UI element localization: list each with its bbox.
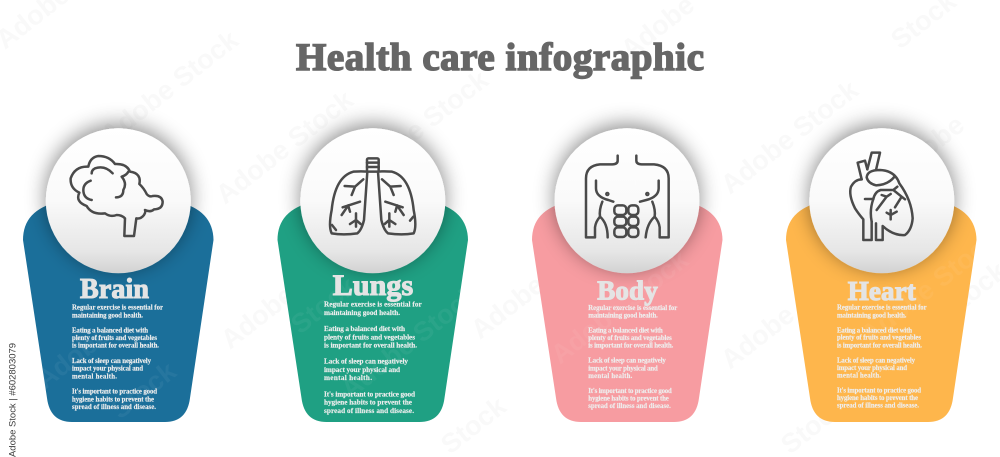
watermark overlay on cards (30, 224, 1000, 425)
brain text (72, 304, 163, 411)
heart text: spread of illness and disease. (837, 402, 919, 409)
heart text: impact your physical and (837, 365, 907, 372)
body text: is important for overall health. (588, 343, 674, 350)
heart text: Lack of sleep can negatively (837, 357, 916, 364)
body text: Regular exercise is essential for (588, 305, 677, 312)
brain text: Eating a balanced diet with (72, 327, 148, 334)
watermark overlay on cards: Stock (105, 355, 182, 425)
watermark pattern on background: Adobe (215, 279, 300, 355)
icon: lungs (330, 158, 415, 234)
brain text: mental health. (72, 373, 117, 380)
panel: lungs (278, 128, 468, 422)
lungs text: It's important to practice good (324, 390, 415, 398)
icon: brain (71, 156, 163, 236)
watermark pattern on background: Adobe (715, 299, 800, 375)
stock id side label: Adobe Stock | #602803079 (8, 343, 18, 457)
body text: It's important to practice good (588, 388, 672, 395)
brain text: is important for overall health. (72, 343, 159, 350)
body text: Lack of sleep can negatively (588, 358, 666, 365)
brain text: hygiene habits to prevent the (72, 396, 154, 403)
brain icon circle (46, 128, 191, 273)
panel: brain (23, 128, 214, 422)
panel: body (532, 128, 722, 422)
body text: impact your physical and (588, 365, 658, 372)
body text: Eating a balanced diet with (588, 328, 663, 335)
heart text: It's important to practice good (837, 387, 921, 394)
watermark pattern on background: Adobe Stock (210, 84, 360, 210)
icon: heart (850, 153, 913, 240)
heart text: is important for overall health. (837, 342, 922, 349)
watermark overlay on cards: Adobe Stock (335, 279, 485, 405)
title: Health care infographic (296, 36, 704, 79)
heart text: Eating a balanced diet with (837, 327, 912, 334)
panel: heart (786, 128, 976, 422)
lungs text: spread of illness and disease. (324, 407, 414, 415)
watermark pattern on background: Adobe (885, 109, 970, 185)
heart text: Regular exercise is essential for (837, 305, 927, 312)
lungs text: mental health. (324, 374, 372, 382)
body heading: Body (597, 275, 658, 305)
brain text: spread of illness and disease. (72, 404, 156, 411)
brain card background (23, 202, 214, 422)
heart text: maintaining good health. (837, 312, 907, 319)
heart card background (786, 202, 976, 422)
heart text (837, 305, 927, 409)
lungs heading: Lungs (333, 269, 413, 302)
heart heading: Heart (848, 276, 916, 306)
lungs text: impact your physical and (324, 366, 400, 374)
lungs icon circle (300, 128, 445, 273)
body icon circle (554, 128, 700, 273)
watermark overlay on cards: Adobe Stock (545, 244, 695, 370)
lungs text: Lack of sleep can negatively (324, 358, 408, 366)
body text: spread of illness and disease. (588, 403, 671, 410)
icon: torso (586, 156, 669, 237)
watermark overlay on cards: Adobe (30, 319, 115, 395)
brain text: maintaining good health. (72, 312, 143, 319)
watermark pattern on background: Adobe Stock (95, 24, 245, 150)
lungs text: Regular exercise is essential for (324, 301, 422, 309)
body text: plenty of fruits and vegetables (588, 335, 672, 342)
body text: hygiene habits to prevent the (588, 395, 669, 402)
lungs text: Eating a balanced diet with (324, 325, 405, 333)
brain text: It's important to practice good (72, 389, 157, 396)
brain text: Regular exercise is essential for (72, 304, 163, 311)
lungs text: maintaining good health. (324, 309, 400, 317)
lungs text: plenty of fruits and vegetables (324, 333, 415, 341)
lungs card background (278, 202, 468, 422)
body text: mental health. (588, 373, 633, 380)
brain text: Lack of sleep can negatively (72, 358, 152, 365)
lungs text: is important for overall health. (324, 341, 417, 349)
watermark pattern on background: Adobe (465, 269, 550, 345)
watermark pattern on background: Adobe Stock (345, 64, 495, 190)
body text (588, 305, 677, 410)
watermark overlay on cards: Adobe Stock (855, 224, 1000, 350)
body text: maintaining good health. (588, 313, 658, 320)
heart text: plenty of fruits and vegetables (837, 335, 921, 342)
body card background (532, 202, 722, 422)
heart icon circle (809, 128, 954, 273)
lungs text: hygiene habits to prevent the (324, 399, 412, 407)
brain heading: Brain (80, 274, 149, 305)
watermark pattern on background: Adobe Stock (715, 74, 865, 200)
lungs text (324, 301, 422, 415)
watermark overlay on cards: Stock (285, 270, 362, 340)
heart text: hygiene habits to prevent the (837, 395, 918, 402)
brain text: impact your physical and (72, 366, 143, 373)
brain text: plenty of fruits and vegetables (72, 335, 157, 342)
heart text: mental health. (837, 372, 881, 379)
